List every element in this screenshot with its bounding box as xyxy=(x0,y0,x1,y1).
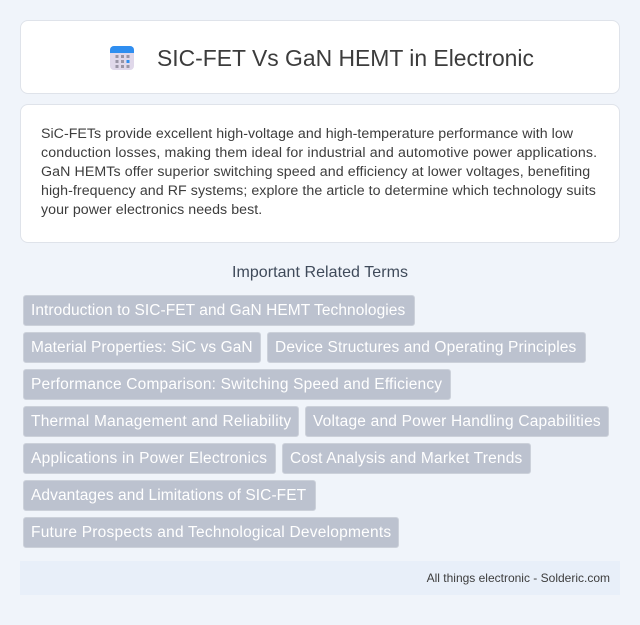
term tags xyxy=(23,295,609,548)
tag xyxy=(267,332,586,363)
section heading: Important Related Terms xyxy=(232,264,408,281)
tag: Advantages and Limitations of SIC-FET xyxy=(31,487,306,504)
tag: Applications in Power Electronics xyxy=(31,450,267,467)
title card xyxy=(20,20,620,94)
tag: Introduction to SIC-FET and GaN HEMT Technologies xyxy=(31,302,405,319)
tag: Performance Comparison: Switching Speed and Efficiency xyxy=(31,376,442,393)
tag: Thermal Management and Reliability xyxy=(31,413,291,430)
intro card xyxy=(20,104,620,243)
tag: Voltage and Power Handling Capabilities xyxy=(313,413,601,430)
icon: calendar xyxy=(110,46,134,70)
footer text: All things electronic - Solderic.com xyxy=(427,571,610,585)
title: SIC-FET Vs GaN HEMT in Electronic xyxy=(157,45,534,71)
tag: Device Structures and Operating Principles xyxy=(275,339,576,356)
tag xyxy=(23,517,399,548)
tag xyxy=(23,443,276,474)
tag: Cost Analysis and Market Trends xyxy=(290,450,522,467)
intro text: conduction losses, making them ideal for industrial and automotive power applications. xyxy=(41,145,597,161)
tag: Material Properties: SiC vs GaN xyxy=(31,339,253,356)
tag xyxy=(23,480,316,511)
intro text: GaN HEMTs offer superior switching speed and efficiency at lower voltages, benefiting xyxy=(41,164,590,180)
tag xyxy=(23,295,415,326)
intro text: SiC-FETs provide excellent high-voltage and high-temperature performance with low xyxy=(41,126,573,142)
tag xyxy=(23,406,299,437)
tag xyxy=(23,332,261,363)
intro text xyxy=(41,126,597,218)
intro text: high-frequency and RF systems; explore the article to determine which technology suits xyxy=(41,183,596,199)
tag xyxy=(282,443,531,474)
footer bar xyxy=(20,561,620,595)
tag: Future Prospects and Technological Developments xyxy=(31,524,391,541)
tag xyxy=(305,406,609,437)
intro text: your power electronics needs best. xyxy=(41,202,262,218)
tag xyxy=(23,369,451,400)
